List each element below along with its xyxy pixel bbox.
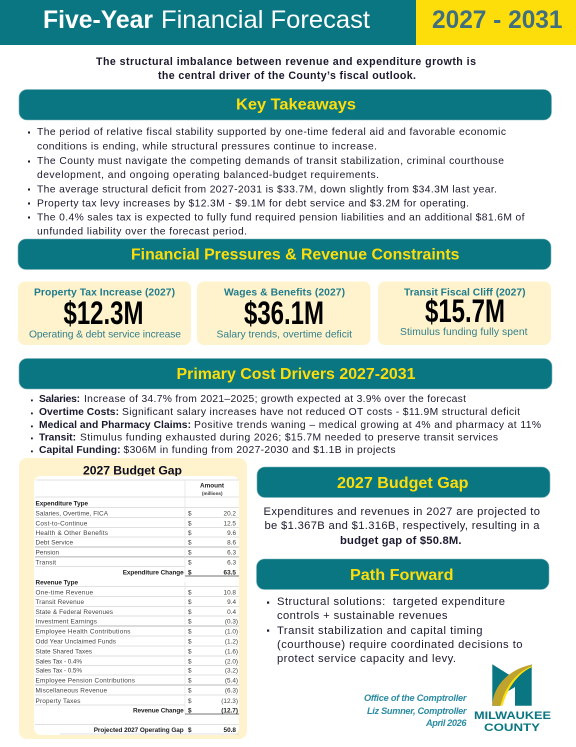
budget table: $ xyxy=(188,677,192,684)
heading: financial pressures xyxy=(18,239,551,270)
title: Financial Forecast xyxy=(161,6,370,34)
budget table xyxy=(34,476,239,735)
budget table: (3.2) xyxy=(225,668,238,674)
path forward list: protect service capacity and levy. xyxy=(277,653,456,665)
budget table: $ xyxy=(188,549,192,556)
card: property tax increase xyxy=(18,282,191,345)
cost drivers list: $306M in funding from 2027-2030 and $1.1B in projects xyxy=(124,445,396,456)
cost drivers list: Increase of 34.7% from 2021–2025; growth expected at 3.9% over the forecast xyxy=(84,394,466,405)
comptroller credit: Liz Sumner, Comptroller xyxy=(367,706,467,716)
budget table: $ xyxy=(188,687,192,694)
key takeaways list: development, and ongoing operating balanced-budget requirements. xyxy=(37,170,379,181)
path forward list: controls + sustainable revenues xyxy=(277,610,448,622)
key takeaways list: conditions is ending, while structural pressures continue to increase. xyxy=(37,142,377,152)
card: property tax increase: $12.3M xyxy=(64,295,144,331)
path forward list xyxy=(267,596,522,665)
path forward list: (courthouse) require coordinated decisions to xyxy=(277,639,522,651)
heading: primary cost drivers: Primary Cost Drivers 2027-2031 xyxy=(176,366,416,383)
budget gap summary text: be $1.367B and $1.316B, respectively, resulting in a xyxy=(264,520,540,532)
card: transit fiscal cliff: Stimulus funding fully spent xyxy=(400,327,528,338)
key takeaways list: unfunded liability over the forecast period. xyxy=(37,226,247,238)
intro statement: The structural imbalance between revenue and expenditure growth is xyxy=(96,56,476,68)
budget table: $ xyxy=(188,648,192,655)
budget gap summary text: Expenditures and revenues in 2027 are projected to xyxy=(264,506,540,518)
header banner xyxy=(0,0,576,45)
budget table: Amount xyxy=(200,482,225,490)
budget table: 6.3 xyxy=(227,549,236,556)
heading: path forward: Path Forward xyxy=(350,567,454,584)
budget table: $ xyxy=(188,589,192,596)
year range: 2027 - 2031 xyxy=(432,6,563,34)
budget table: Pension xyxy=(36,549,59,556)
title xyxy=(43,6,370,34)
comptroller credit: Office of the Comptroller xyxy=(364,693,467,703)
path forward list: Structural solutions: targeted expenditure xyxy=(277,596,505,608)
budget table: 6.3 xyxy=(227,559,236,566)
cost drivers list: Significant salary increases have not reduced OT costs - $11.9M structural deficit xyxy=(122,407,520,418)
budget table: Projected 2027 Operating Gap xyxy=(94,727,184,734)
budget table: $ xyxy=(188,510,192,517)
budget table: $ xyxy=(188,707,192,714)
budget table: 12.5 xyxy=(224,520,236,527)
cost drivers list: Medical and Pharmacy Claims: xyxy=(39,420,191,431)
key takeaways list: The County must navigate the competing demands of transit stabilization, criminal courthouse xyxy=(37,156,504,167)
budget table: Employee Pension Contributions xyxy=(36,677,135,684)
card: wages and benefits xyxy=(197,282,370,345)
budget table: $ xyxy=(188,520,192,527)
budget table: $ xyxy=(188,698,192,705)
path forward list: Transit stabilization and capital timing xyxy=(277,625,482,637)
budget table: 9.4 xyxy=(227,599,236,606)
budget table: Transit xyxy=(36,559,56,566)
key takeaways list: The 0.4% sales tax is expected to fully fund required pension liabilities and an additional $81.6M of xyxy=(37,212,525,224)
budget table: One-time Revenue xyxy=(36,589,93,596)
budget table: (1.2) xyxy=(225,638,238,645)
budget table: (1.6) xyxy=(225,648,238,655)
budget table: (12.7) xyxy=(221,707,238,714)
cost drivers list: Salaries: xyxy=(39,394,80,405)
budget table: (millions) xyxy=(202,491,223,496)
budget gap summary text xyxy=(264,506,540,547)
cost drivers list: Stimulus funding exhausted during 2026; $15.7M needed to preserve transit services xyxy=(80,432,498,444)
budget table: State Shared Taxes xyxy=(36,648,92,655)
budget table: Revenue Type xyxy=(36,579,78,586)
budget table: (0.3) xyxy=(225,618,238,625)
card: transit fiscal cliff: $15.7M xyxy=(425,293,505,329)
budget table: Revenue Change xyxy=(133,707,184,714)
budget table: $ xyxy=(188,658,192,665)
heading: key takeaways: Key Takeaways xyxy=(236,96,356,114)
budget table: $ xyxy=(188,609,192,616)
budget table: Expenditure Change xyxy=(123,569,184,576)
budget table: $ xyxy=(188,618,192,625)
card: wages and benefits: Wages & Benefits (2027) xyxy=(224,288,345,298)
budget table: Health & Other Benefits xyxy=(36,530,108,537)
heading: primary cost drivers xyxy=(19,358,552,389)
budget table: Odd Year Unclaimed Funds xyxy=(36,638,116,645)
card: wages and benefits: Salary trends, overtime deficit xyxy=(216,330,352,340)
cost drivers list: Positive trends waning – medical growing at 4% and pharmacy at 11% xyxy=(194,420,541,431)
budget table: (2.0) xyxy=(225,658,238,665)
budget table: Salaries, Overtime, FICA xyxy=(36,510,109,517)
budget table: 0.4 xyxy=(227,609,236,616)
budget table: Sales Tax - 0.5% xyxy=(36,668,82,674)
cost drivers list: Overtime Costs: xyxy=(39,407,119,418)
budget gap summary text: budget gap of $50.8M. xyxy=(340,535,462,547)
budget table: Expenditure Type xyxy=(36,500,88,507)
budget table: 10.8 xyxy=(224,589,236,596)
budget table: State & Federal Revenues xyxy=(36,609,113,616)
card: transit fiscal cliff: Transit Fiscal Cliff (2027) xyxy=(404,288,526,298)
intro statement xyxy=(96,56,476,82)
budget table: (5.4) xyxy=(225,677,238,684)
budget table: Sales Tax - 0.4% xyxy=(36,658,82,665)
cost drivers list xyxy=(31,394,541,456)
budget table: Miscellaneous Revenue xyxy=(36,687,107,694)
intro statement: the central driver of the County’s fiscal outlook. xyxy=(158,70,416,82)
comptroller credit: April 2026 xyxy=(425,718,467,728)
budget table: 20.2 xyxy=(224,510,236,517)
budget table: Investment Earnings xyxy=(36,618,97,625)
budget table: $ xyxy=(188,559,192,566)
key takeaways list: The period of relative fiscal stability supported by one-time federal aid and favorable economic xyxy=(37,127,506,138)
budget table: (1.0) xyxy=(225,628,238,635)
logo: Milwaukee County xyxy=(474,664,551,734)
budget table: Property Taxes xyxy=(36,698,80,705)
heading: 2027 budget gap xyxy=(257,467,550,498)
budget table: $ xyxy=(188,628,192,635)
card: property tax increase: Operating & debt service increase xyxy=(29,330,181,340)
budget table: (6.3) xyxy=(225,687,238,694)
budget table: Debt Service xyxy=(36,540,73,547)
budget table: $ xyxy=(188,599,192,606)
budget table: 8.6 xyxy=(227,540,236,547)
budget table: Cost-to-Continue xyxy=(36,520,88,527)
panel: 2027 budget gap table xyxy=(19,458,247,739)
budget table: 9.6 xyxy=(227,530,236,537)
table heading: 2027 Budget Gap xyxy=(83,464,182,478)
card: wages and benefits: $36.1M xyxy=(244,295,324,331)
budget table: $ xyxy=(188,727,192,734)
key takeaways list: Property tax levy increases by $12.3M - $9.1M for debt service and $3.2M for operating. xyxy=(37,198,469,210)
budget table: (12.3) xyxy=(221,698,238,705)
budget table: $ xyxy=(188,638,192,645)
card: property tax increase: Property Tax Increase (2027) xyxy=(34,288,175,298)
budget table: $ xyxy=(188,540,192,547)
heading: financial pressures: Financial Pressures & Revenue Constraints xyxy=(131,246,460,264)
budget table: Employee Health Contributions xyxy=(36,628,130,635)
icon: M mark xyxy=(492,664,532,706)
logo: Milwaukee County: MILWAUKEE xyxy=(474,710,551,722)
budget table: $ xyxy=(188,530,192,537)
budget table: 63.5 xyxy=(224,569,236,576)
budget table: Transit Revenue xyxy=(36,599,84,606)
budget table: $ xyxy=(188,569,192,576)
heading: key takeaways xyxy=(19,90,552,120)
comptroller credit xyxy=(364,693,467,728)
budget table: $ xyxy=(188,668,192,674)
cost drivers list: Transit: xyxy=(39,432,76,444)
heading: path forward xyxy=(256,559,549,590)
card: transit fiscal cliff xyxy=(378,282,551,345)
title: Five-Year xyxy=(43,6,153,34)
key takeaways list: The average structural deficit from 2027-2031 is $33.7M, down slightly from $34.3M last year. xyxy=(37,184,497,196)
budget table: 50.8 xyxy=(224,727,236,734)
heading: 2027 budget gap: 2027 Budget Gap xyxy=(337,475,468,492)
key takeaways list xyxy=(28,127,525,238)
logo: Milwaukee County: COUNTY xyxy=(484,722,541,734)
cost drivers list: Capital Funding: xyxy=(39,445,120,456)
